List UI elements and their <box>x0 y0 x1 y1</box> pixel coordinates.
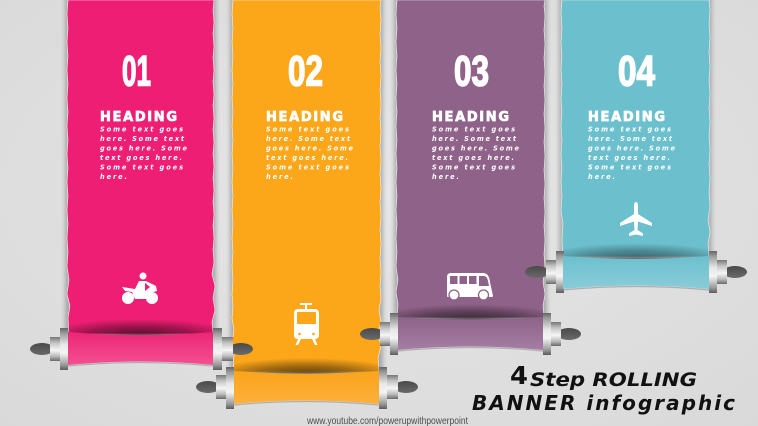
roll 3 left end cap <box>360 313 398 355</box>
number 03: 03 <box>454 48 489 96</box>
banner 2 shadow above roll <box>234 358 379 374</box>
banner 1 paper with torn edges <box>67 0 215 334</box>
roll 4 <box>525 251 747 293</box>
panel: banner 2 orange <box>228 0 385 374</box>
title <box>472 361 735 415</box>
body text 3: goes here. Some <box>432 144 520 152</box>
roll 1 left end cap <box>30 328 68 370</box>
body text 2: here. Some text <box>266 135 351 143</box>
banner 4 cast shadow <box>559 0 712 256</box>
body text 1: Some text goes <box>100 126 183 134</box>
heading 4: HEADING <box>588 110 665 125</box>
body text 1 <box>100 126 188 181</box>
heading 2: HEADING <box>266 110 343 125</box>
roll 4 right end cap <box>709 251 747 293</box>
banner 4 shadow above roll <box>563 244 709 259</box>
body text 2: text goes here. <box>266 154 348 162</box>
body text 1: goes here. Some <box>100 144 188 152</box>
heading 3: HEADING <box>432 110 509 125</box>
panel: banner 4 teal <box>557 0 714 259</box>
body text 3: here. Some text <box>432 135 517 143</box>
body text 4 <box>588 126 676 181</box>
body text 1: Some text goes <box>100 164 183 172</box>
heading 1: HEADING <box>100 110 177 125</box>
banner 3 cast shadow <box>394 0 547 317</box>
roll 3 fabric <box>398 317 543 351</box>
body text 1: text goes here. <box>100 154 182 162</box>
icon: motorcycle <box>122 272 158 304</box>
body text 3: Some text goes <box>432 164 515 172</box>
roll 2 left end cap <box>196 367 234 409</box>
body text 4: Some text goes <box>588 164 671 172</box>
body text 3 <box>432 126 520 181</box>
banner 1 cast shadow <box>65 0 216 332</box>
body text 1: here. Some text <box>100 135 185 143</box>
number 02: 02 <box>288 48 323 96</box>
body text 4: Some text goes <box>588 126 671 134</box>
roll 1 right end cap <box>213 328 253 370</box>
roll 1 fabric <box>68 332 213 366</box>
body text 2: Some text goes <box>266 126 349 134</box>
roll 2 <box>196 367 418 409</box>
banner 2 paper with torn edges <box>232 0 381 372</box>
roll 4 left end cap <box>525 251 564 293</box>
body text 4: goes here. Some <box>588 144 676 152</box>
roll 1 <box>30 328 253 370</box>
number 04: 04 <box>618 48 655 96</box>
panel: banner 3 purple <box>392 0 549 320</box>
icon: plane <box>620 202 652 236</box>
title: BANNER infographic <box>472 391 735 415</box>
body text 4: text goes here. <box>588 154 670 162</box>
icon: train <box>294 303 319 345</box>
body text 2: goes here. Some <box>266 144 354 152</box>
title: Step ROLLING <box>530 369 697 391</box>
banner 1 shadow above roll <box>68 320 213 335</box>
banner 4 paper with torn edges <box>561 0 710 257</box>
body text 4: here. <box>588 173 615 181</box>
roll 3 <box>360 313 581 355</box>
number 01: 01 <box>122 48 151 96</box>
roll 2 fabric <box>234 371 379 405</box>
roll 3 right end cap <box>543 313 581 355</box>
banner 3 paper with torn edges <box>396 0 545 318</box>
body text 3: here. <box>432 173 459 181</box>
body text 4: here. Some text <box>588 135 673 143</box>
title: 4 <box>510 361 528 390</box>
body text 2 <box>266 126 354 181</box>
roll 4 fabric <box>563 256 709 290</box>
roll 2 right end cap <box>379 367 418 409</box>
body text 3: Some text goes <box>432 126 515 134</box>
body text 2: here. <box>266 173 293 181</box>
panel: banner 1 pink <box>63 0 218 335</box>
banner 3 shadow above roll <box>398 306 543 320</box>
icon: bus <box>447 273 493 300</box>
body text 3: text goes here. <box>432 154 514 162</box>
body text 2: Some text goes <box>266 164 349 172</box>
banner 2 cast shadow <box>230 0 383 371</box>
body text 1: here. <box>100 173 127 181</box>
